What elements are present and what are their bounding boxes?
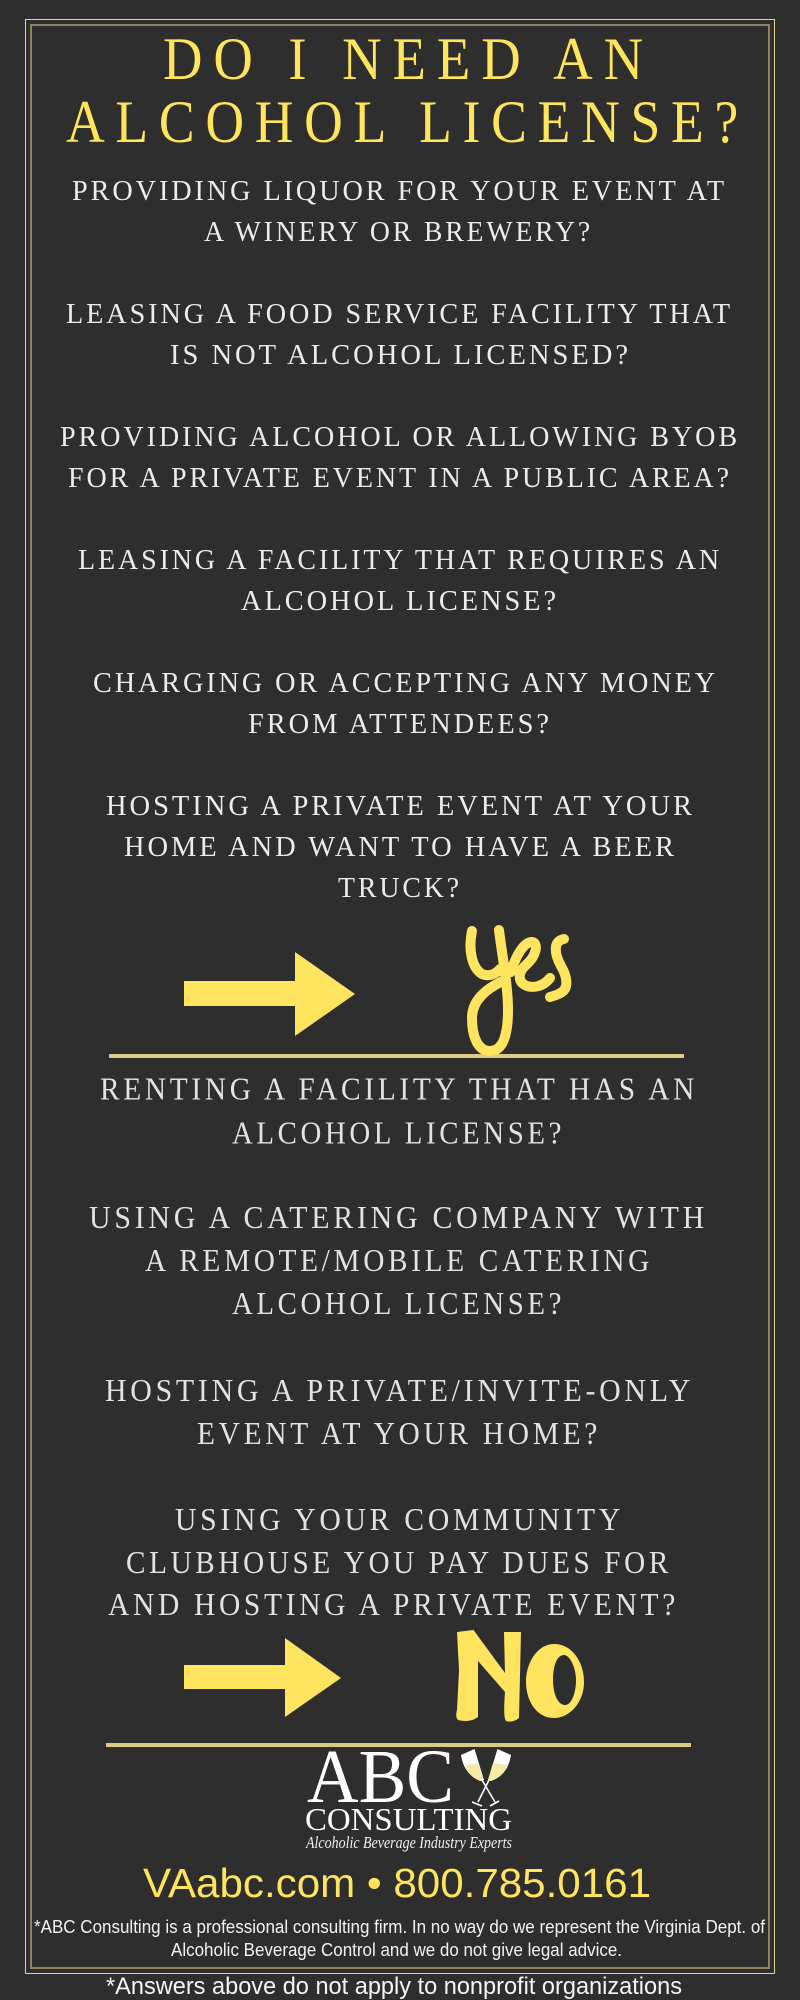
divider: yes section	[109, 1054, 684, 1058]
arrow: to yes	[184, 952, 355, 1036]
icon: handwritten yes	[470, 930, 566, 1051]
question: catering company: A REMOTE/MOBILE CATERING	[145, 1242, 653, 1278]
logo: ABC Consulting: Alcoholic Beverage Industry Experts	[305, 1833, 512, 1852]
question: invite-only at home: HOSTING A PRIVATE/INVITE-ONLY	[105, 1372, 694, 1408]
question: beer truck at home: HOSTING A PRIVATE EVENT AT YOUR	[106, 790, 695, 822]
question: facility requires license: ALCOHOL LICENSE?	[241, 585, 559, 617]
question: catering company: USING A CATERING COMPANY WITH	[89, 1199, 708, 1235]
disclaimer: *ABC Consulting is a professional consulting firm. In no way do we represent the Virginia Dept. of	[34, 1917, 766, 1937]
question: community clubhouse: CLUBHOUSE YOU PAY DUES FOR	[126, 1544, 672, 1580]
question: facility requires license: LEASING A FACILITY THAT REQUIRES AN	[78, 544, 722, 576]
question: charging attendees	[93, 667, 718, 740]
arrow: to no	[184, 1638, 341, 1717]
question: community clubhouse: AND HOSTING A PRIVATE EVENT?	[108, 1586, 679, 1622]
question: BYOB in public area: PROVIDING ALCOHOL OR ALLOWING BYOB	[60, 421, 740, 453]
question: BYOB in public area	[60, 421, 740, 494]
question: liquor at winery or brewery: PROVIDING LIQUOR FOR YOUR EVENT AT	[72, 175, 727, 207]
question: renting licensed facility: ALCOHOL LICENSE?	[232, 1114, 565, 1150]
title	[66, 26, 749, 155]
logo: ABC Consulting	[305, 1735, 512, 1852]
question: invite-only at home: EVENT AT YOUR HOME?	[197, 1415, 601, 1451]
question: facility requires license	[78, 544, 722, 617]
question: community clubhouse: USING YOUR COMMUNITY	[175, 1501, 624, 1537]
disclaimer	[34, 1917, 766, 1960]
question: liquor at winery or brewery: A WINERY OR BREWERY?	[204, 216, 593, 248]
question: catering company	[89, 1199, 708, 1321]
icon: crossed champagne glasses	[461, 1749, 511, 1806]
logo: ABC Consulting: ABC	[307, 1735, 454, 1819]
question: catering company: ALCOHOL LICENSE?	[232, 1285, 565, 1321]
question: beer truck at home: HOME AND WANT TO HAVE A BEER	[124, 831, 677, 863]
question: renting licensed facility	[100, 1070, 698, 1150]
contact line: VAabc.com • 800.785.0161	[143, 1860, 651, 1906]
divider: no section	[106, 1743, 691, 1747]
question: BYOB in public area: FOR A PRIVATE EVENT IN A PUBLIC AREA?	[68, 462, 732, 494]
icon: hand-lettered no	[456, 1630, 584, 1722]
question: beer truck at home: TRUCK?	[338, 872, 462, 904]
footnote: *Answers above do not apply to nonprofit organizations	[106, 1973, 682, 2000]
question: leasing food service facility	[66, 298, 733, 371]
question: leasing food service facility: IS NOT ALCOHOL LICENSED?	[170, 339, 631, 371]
question: charging attendees: CHARGING OR ACCEPTING ANY MONEY	[93, 667, 718, 699]
question: leasing food service facility: LEASING A FOOD SERVICE FACILITY THAT	[66, 298, 733, 330]
logo: ABC Consulting: CONSULTING	[305, 1801, 512, 1837]
question: community clubhouse	[108, 1501, 679, 1622]
question: liquor at winery or brewery	[72, 175, 727, 248]
question: charging attendees: FROM ATTENDEES?	[248, 708, 552, 740]
question: beer truck at home	[106, 790, 695, 904]
question: invite-only at home	[105, 1372, 694, 1451]
title: DO I NEED AN	[163, 26, 654, 92]
question: renting licensed facility: RENTING A FACILITY THAT HAS AN	[100, 1070, 698, 1106]
disclaimer: Alcoholic Beverage Control and we do not give legal advice.	[171, 1940, 622, 1960]
